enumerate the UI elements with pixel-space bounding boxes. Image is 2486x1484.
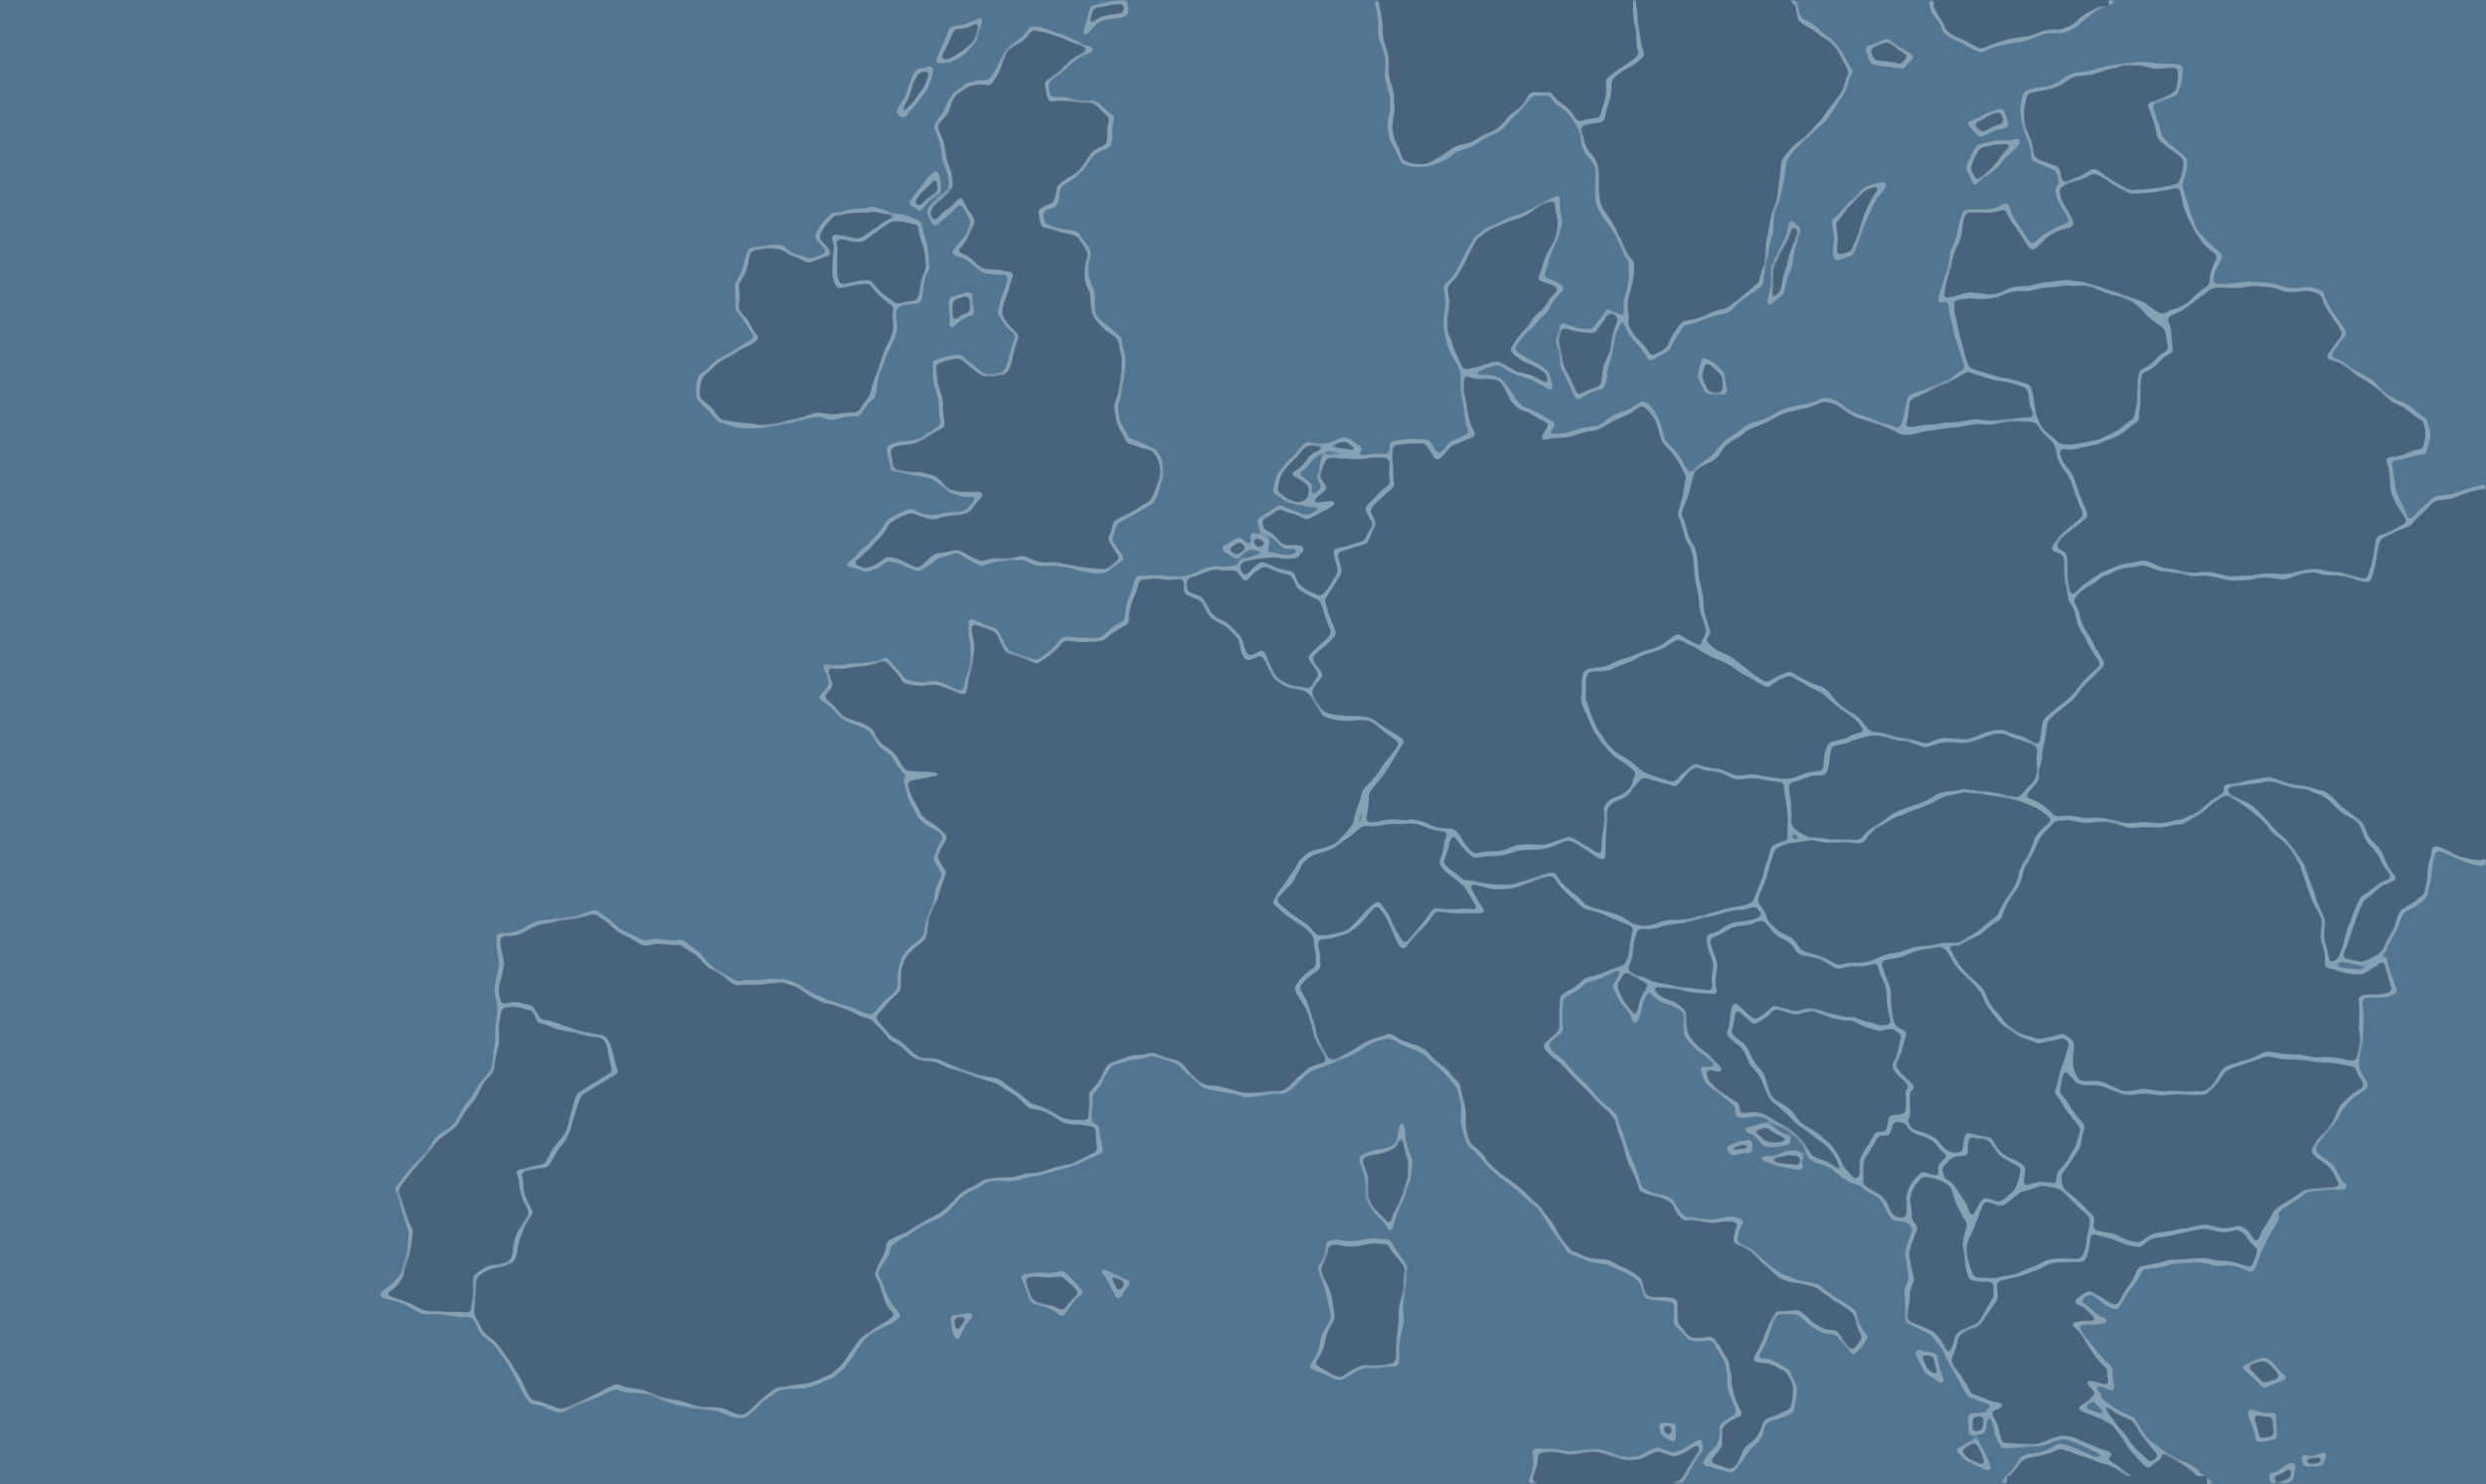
Hebrides [912,171,938,210]
Peloponnese [2001,1447,2140,1484]
Sicily [1530,1444,1703,1484]
Orkney [940,19,983,61]
Ukraine [2022,488,2486,967]
Kaliningrad [1903,370,2038,428]
Mallorca [1023,1273,1081,1316]
Great Britain [848,29,1162,571]
Poland [1678,400,2100,748]
Corsica [1361,1125,1411,1229]
Oland [1771,222,1799,301]
Bornholm [1700,362,1725,394]
Moldova [2228,777,2394,967]
Bulgaria [2055,1055,2366,1244]
Gotska island [1868,40,1910,67]
Czech Republic [1582,637,1871,785]
Serbia [1879,943,2081,1191]
Croatian island Korcula [1763,1154,1803,1167]
Finland [1931,0,2116,51]
Slovenia [1625,904,1763,991]
Italy [1297,875,1866,1468]
France [821,577,1404,1122]
Montenegro [1862,1118,1953,1221]
Spain [472,911,1098,1415]
Aeolian island [1660,1423,1674,1439]
Corfu [1918,1351,1940,1380]
Portugal [384,1007,618,1316]
Lemnos island [2243,1361,2286,1386]
Croatian island Brac [1747,1127,1788,1145]
Denmark Jutland [1446,198,1562,389]
Netherlands [1237,456,1392,599]
Lithuania [1950,282,2172,447]
Greece mainland [1950,1218,2276,1484]
Switzerland [1276,821,1482,948]
Euboea [2092,1399,2159,1466]
Gotland [1831,182,1884,256]
Norway [1376,0,1641,167]
land strips along the frame edges [1384,0,2486,1484]
Denmark Zealand [1557,309,1620,397]
Croatian island Vis [1729,1141,1750,1154]
Romania [1942,793,2398,1094]
Zeeland east island [1252,535,1270,551]
Bosnia [1727,1004,1912,1181]
Sardinia [1313,1239,1408,1380]
Belarus [2054,285,2425,599]
Latvia [1942,171,2220,317]
Austria [1442,764,1791,927]
Ireland [698,210,929,428]
North Holland [1274,440,1362,504]
Chios island [2270,1466,2291,1484]
Samos island [2302,1454,2324,1465]
Saaremaa [1966,139,2017,182]
Lesbos island [2251,1411,2275,1439]
Estonia [2023,64,2185,194]
Belgium [1184,565,1332,693]
Sweden [1577,0,1852,357]
Ionian island Cephalonia [1958,1439,1988,1468]
Hungary [1756,789,2054,967]
Lewis [899,67,932,114]
Kosovo [1940,1135,2023,1221]
Slovakia [1788,733,2042,840]
Ionian island Lefkada [1969,1414,1985,1433]
Isle of Man [951,295,972,325]
North Macedonia [1963,1185,2091,1284]
Shetland [1086,0,1125,32]
Menorca [1102,1271,1129,1297]
Ibiza [951,1313,972,1340]
Northern Ireland [832,222,929,304]
Croatia [1614,916,1893,1183]
Zeeland west island [1223,539,1250,558]
Germany [1308,373,1709,856]
Albania [1906,1173,1995,1357]
Hiiumaa [1969,111,2006,135]
